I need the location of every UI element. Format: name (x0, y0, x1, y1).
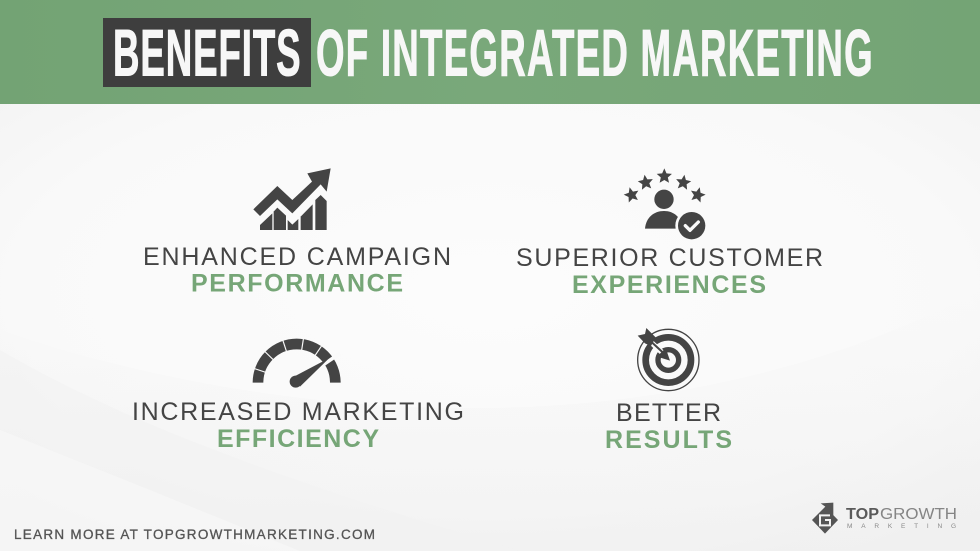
title: of integrated marketing: OF INTEGRATED MARKETING (316, 17, 873, 90)
icon: customer with stars and check (622, 168, 708, 242)
footer link text: LEARN MORE AT TOPGROWTHMARKETING.COM (14, 527, 375, 542)
panel: increased marketing efficiency (132, 335, 464, 453)
wordmark: TOP (846, 506, 879, 523)
icon: rising chart with arrow (253, 168, 331, 230)
label: BETTER (616, 399, 721, 427)
panel: superior customer experiences (516, 168, 823, 299)
panel: enhanced campaign performance (143, 168, 451, 298)
title: benefits: BENEFITS (113, 17, 301, 90)
label accent: PERFORMANCE (191, 270, 403, 298)
label: SUPERIOR CUSTOMER (516, 244, 823, 272)
panel: better results (605, 328, 732, 454)
label accent: RESULTS (605, 426, 732, 454)
logo: top growth marketing (812, 503, 957, 534)
wordmark subline: MARKETING (847, 523, 956, 530)
logo: top growth marketing: GROWTH (880, 506, 957, 523)
header banner (0, 0, 980, 104)
icon: target with dart (638, 328, 699, 391)
label: ENHANCED CAMPAIGN (143, 243, 451, 271)
label accent: EXPERIENCES (572, 271, 766, 299)
label: INCREASED MARKETING (132, 398, 464, 426)
icon: speedometer gauge (251, 335, 340, 388)
icon: logo diamond (812, 503, 838, 534)
title highlight box (103, 18, 311, 87)
label accent: EFFICIENCY (217, 425, 379, 453)
